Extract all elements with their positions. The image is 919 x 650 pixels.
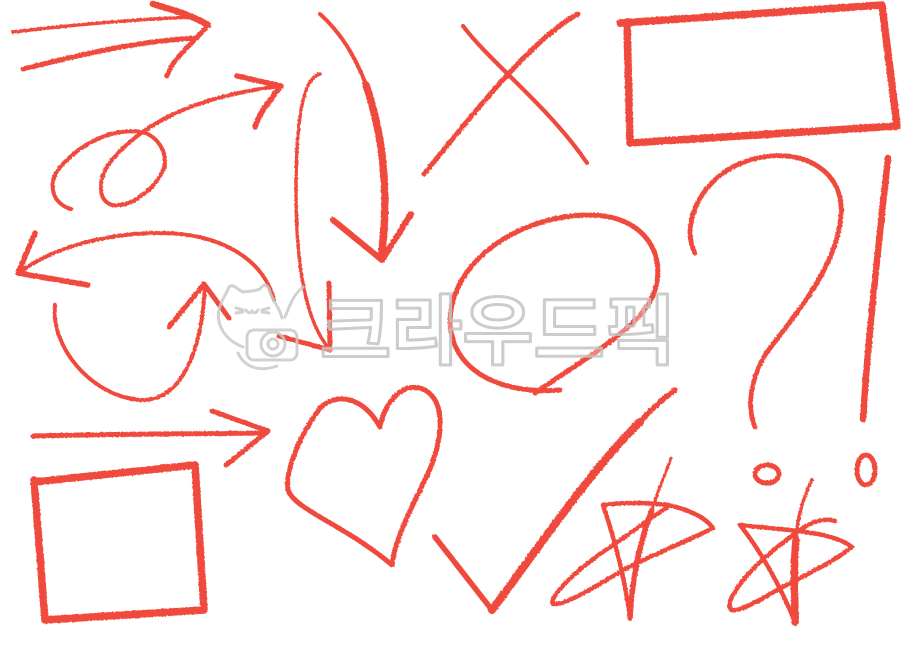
exclamation dot — [857, 455, 875, 485]
rectangle: top right — [620, 5, 897, 143]
exclamation stroke — [863, 158, 888, 419]
arrow: thin curve down — [279, 74, 330, 350]
arrow: double-shaft top left — [13, 4, 208, 76]
heart — [288, 387, 440, 565]
cross mark — [424, 14, 587, 174]
star: right — [730, 480, 852, 622]
watermark wordmark: 크라우드픽 — [320, 290, 676, 375]
arrow: long curve down — [320, 14, 411, 260]
arrow: curved left — [18, 233, 274, 300]
watermark logo — [218, 285, 676, 375]
rectangle: bottom left — [34, 465, 204, 620]
watermark icon: cat with camera — [218, 285, 303, 369]
arrow: curved up — [55, 284, 229, 400]
question mark dot — [755, 465, 779, 483]
question mark — [690, 156, 841, 427]
speech bubble — [450, 215, 658, 393]
arrow: straight right — [33, 411, 268, 465]
check mark — [435, 390, 675, 610]
arrow: looped — [53, 76, 281, 209]
star: left — [552, 458, 713, 618]
